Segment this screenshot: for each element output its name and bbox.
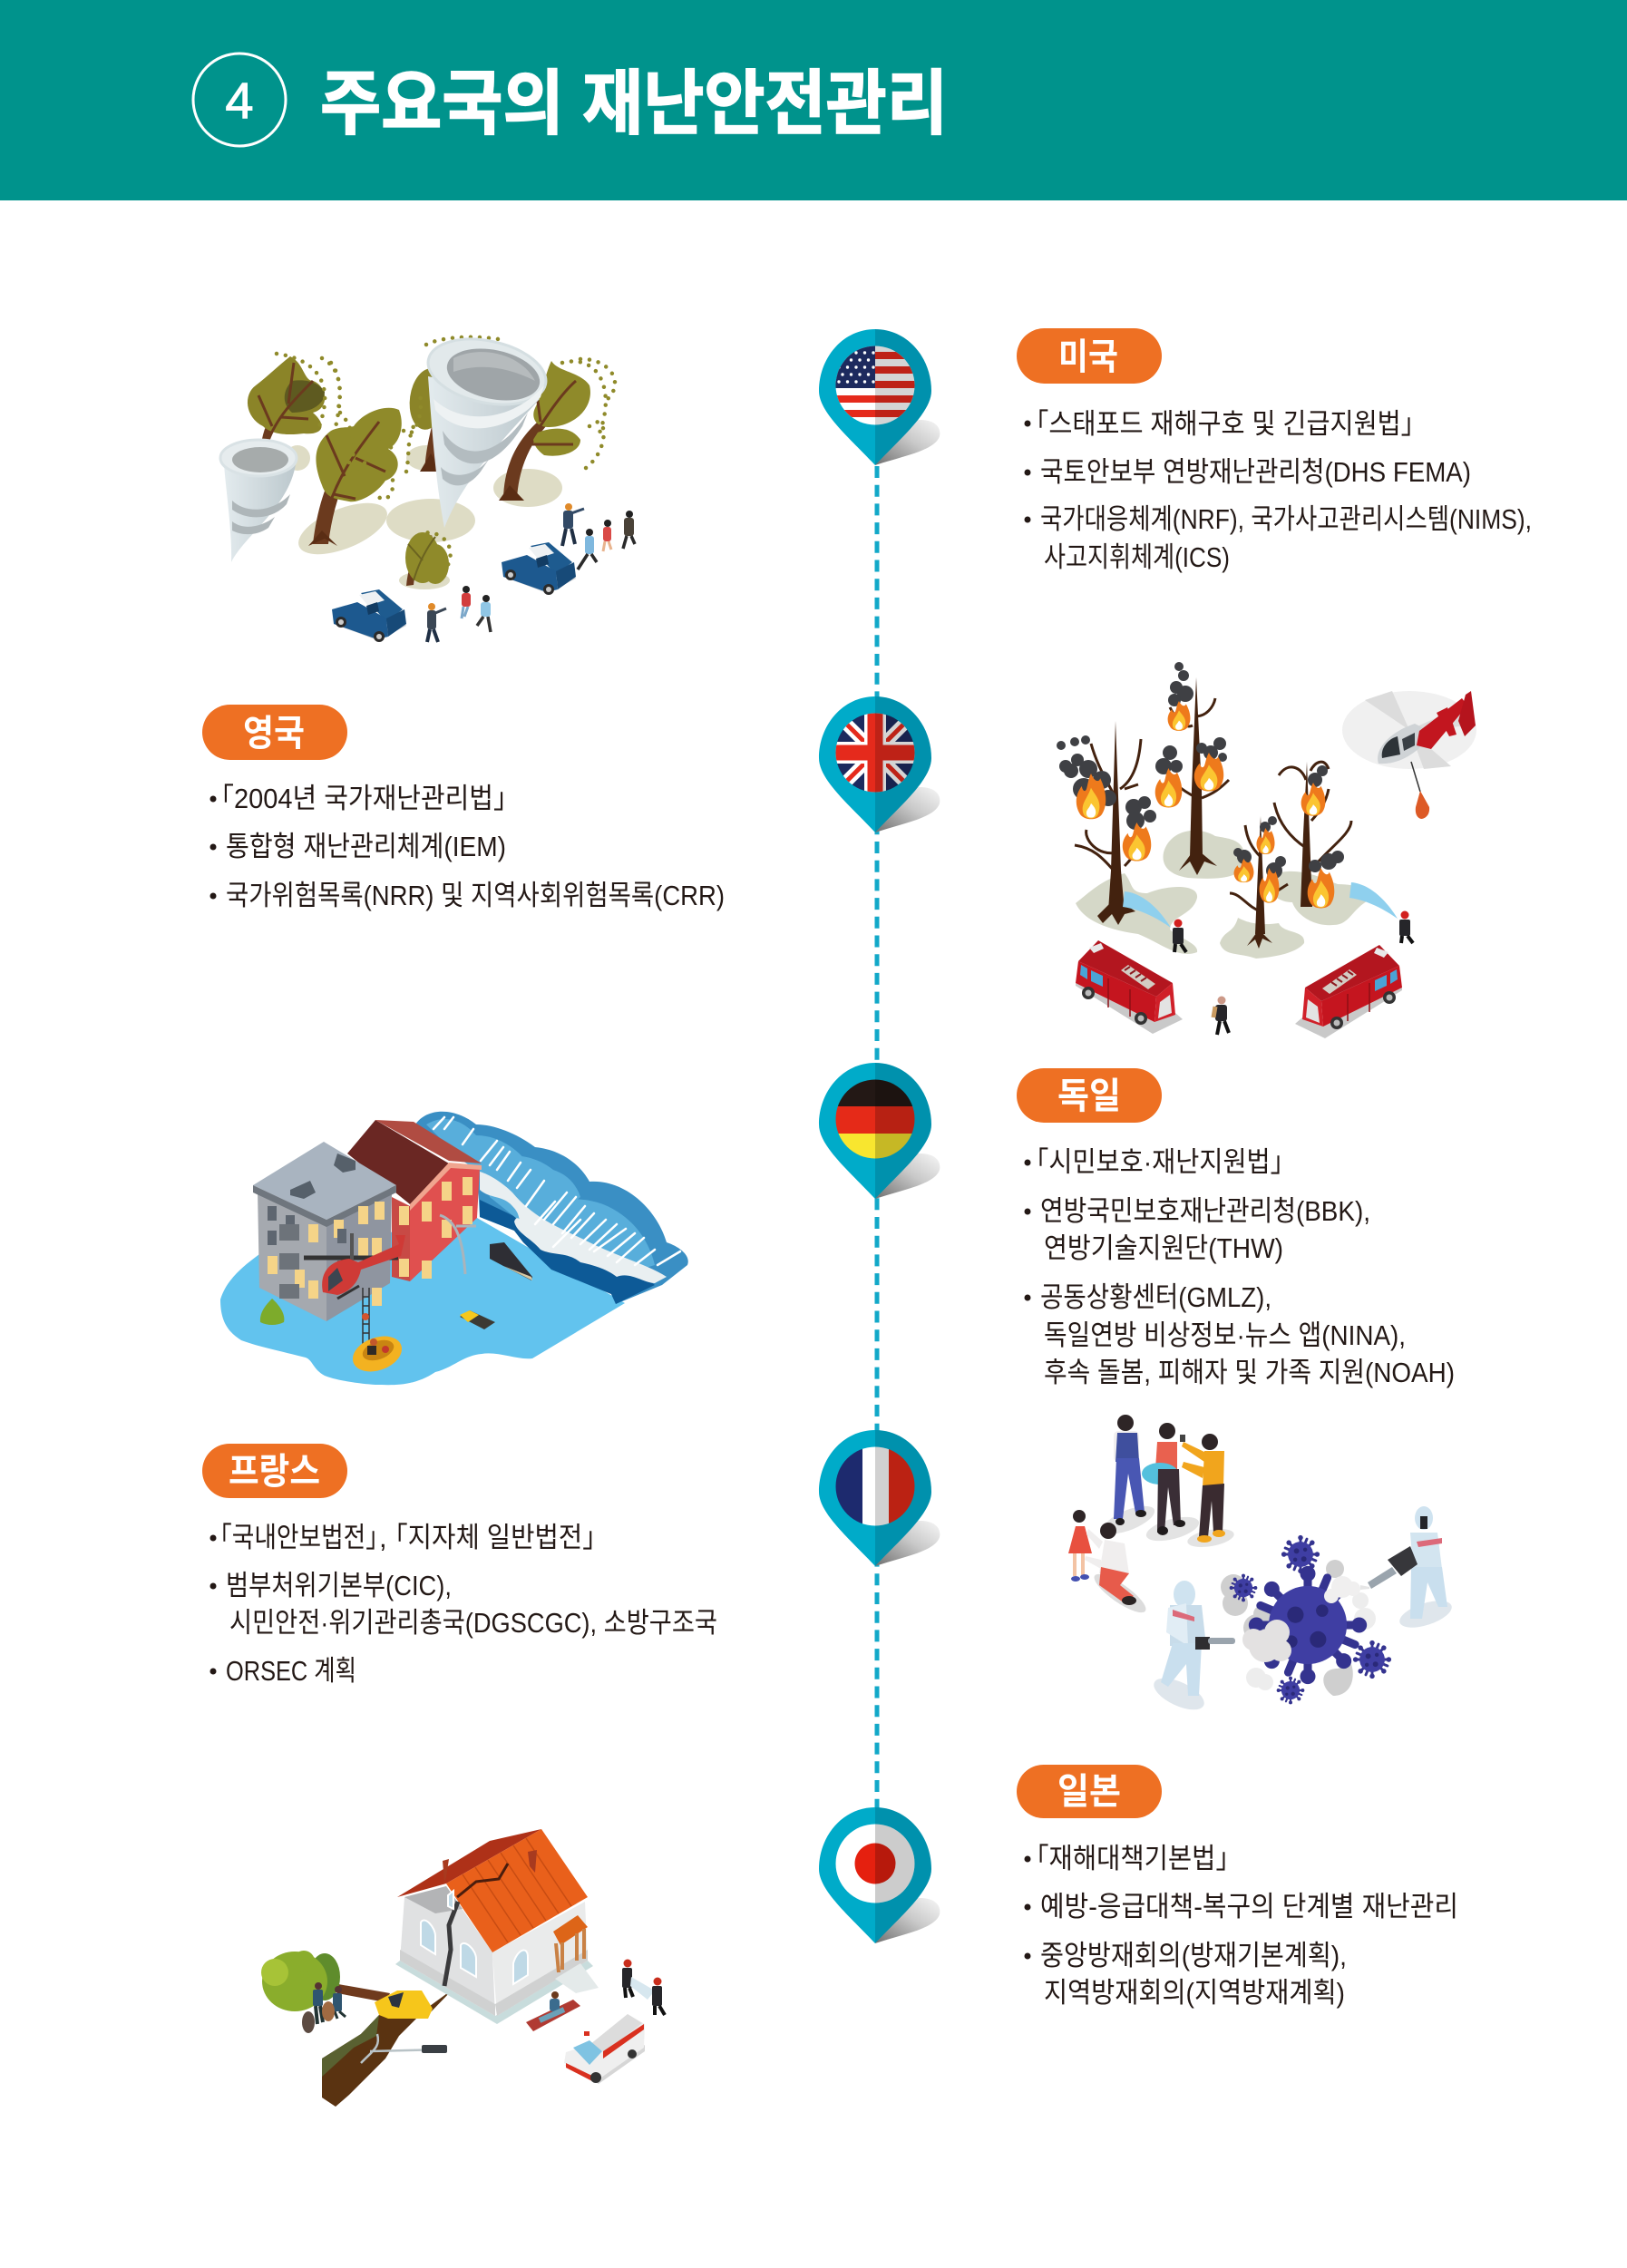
list: Germany: 연방국민보호재난관리청(BBK),: [1040, 1195, 1370, 1227]
list: France: 시민안전·위기관리총국(DGSCGC), 소방구조국: [229, 1607, 717, 1639]
sprayer workers: [1149, 1506, 1455, 1716]
water sprays: [1123, 882, 1398, 928]
list: France: 「국내안보법전」: [208, 1522, 390, 1553]
flood water: [220, 1218, 625, 1385]
rescue helicopter: [304, 1233, 405, 1345]
smoke puffs in front of virus: [1242, 1576, 1369, 1662]
pin: United Kingdom: [819, 696, 940, 832]
list: Germany: 독일연방 비상정보·뉴스 앱(NINA),: [1044, 1319, 1406, 1351]
tornado funnels: [220, 329, 552, 562]
label pill: 영국: 영국: [243, 704, 305, 756]
label pill: 영국: [202, 704, 347, 760]
illustration: tsunami flood: [220, 1112, 688, 1385]
label pill: 미국: 미국: [1058, 327, 1118, 380]
section number badge: [193, 54, 286, 146]
label pill: 프랑스: 프랑스: [229, 1442, 320, 1494]
yellow car: [375, 1991, 433, 2019]
trees: [248, 356, 590, 586]
floating black car: [490, 1242, 532, 1280]
list: Japan: 「재해대책기본법」: [1023, 1843, 1242, 1874]
pin: Japan: [819, 1807, 940, 1943]
timeline dashed connector: [874, 466, 880, 1814]
scorched ground: [1076, 831, 1375, 959]
fire trucks: [1076, 940, 1402, 1038]
tree and rescuers: [261, 1951, 390, 2033]
list: Germany: 후속 돌봄, 피해자 및 가족 지원(NOAH): [1044, 1357, 1455, 1388]
list: United States: [1023, 408, 1532, 573]
list: France: ORSEC 계획: [226, 1655, 356, 1687]
illustration: earthquake: [261, 1829, 665, 2107]
burning trees: [1097, 677, 1312, 949]
list: France: 「지자체 일반법전」: [382, 1522, 609, 1553]
list: United Kingdom: 국가위험목록(NRR) 및 지역사회위험목록(CRR): [226, 880, 725, 911]
firefighters: [1173, 910, 1413, 1035]
list: France: ,: [379, 1522, 387, 1553]
helicopter: [1342, 691, 1476, 819]
police cars: [502, 542, 576, 595]
list: Germany: 「시민보호·재난지원법」: [1023, 1146, 1296, 1178]
list: United States: 국토안보부 연방재난관리청(DHS FEMA): [1040, 456, 1471, 488]
pin: Germany: [819, 1063, 940, 1199]
panel: United States: [1017, 327, 1532, 573]
illustration: wildfire: [1057, 662, 1476, 1038]
label pill: 일본: [1017, 1762, 1162, 1818]
section number badge: 4: [225, 72, 254, 129]
list: France: [208, 1522, 717, 1687]
cracked house: [395, 1829, 599, 2024]
label pill: 미국: [1017, 327, 1162, 384]
grey apartment building: [253, 1142, 396, 1321]
flag: Japan: [835, 1824, 915, 1903]
panel: Germany: [1017, 1066, 1455, 1388]
lifeboat: [348, 1330, 406, 1377]
title: 주요국의 재난안전관리: [320, 47, 948, 149]
pin: France: [819, 1430, 940, 1566]
illustration: tornado: [220, 329, 635, 642]
list: Germany: 연방기술지원단(THW): [1044, 1232, 1283, 1264]
list: Japan: [1023, 1843, 1458, 2009]
list: United States: 국가대응체계(NRF), 국가사고관리시스템(NIMS),: [1040, 503, 1532, 535]
list: United Kingdom: [208, 783, 725, 911]
panel: United Kingdom: [202, 704, 725, 911]
flames: [1077, 701, 1334, 908]
label pill: 일본: 일본: [1057, 1762, 1121, 1815]
list: Japan: 중앙방재회의(방재기본계획),: [1040, 1940, 1347, 1971]
list: Japan: 예방-응급대책-복구의 단계별 재난관리: [1040, 1891, 1458, 1922]
list: Germany: [1023, 1146, 1455, 1388]
panel: Japan: [1017, 1762, 1458, 2009]
pin: United States: [819, 329, 940, 465]
small viruses: [1230, 1535, 1391, 1704]
list: United States: 사고지휘체계(ICS): [1044, 541, 1230, 573]
floating yellow car: [460, 1310, 495, 1329]
evacuating people: [427, 503, 635, 642]
header band: [0, 0, 1627, 200]
flag: United States: [835, 346, 915, 425]
wave: [415, 1112, 688, 1304]
label pill: 독일: [1017, 1066, 1162, 1123]
stretcher rescue: [526, 1991, 580, 2031]
street lamp: [440, 1215, 476, 1274]
illustration: virus response: [1068, 1415, 1455, 1716]
flag: United Kingdom: [835, 713, 915, 793]
panel: France: [202, 1442, 717, 1687]
red building: [347, 1120, 482, 1281]
list: United Kingdom: 통합형 재난관리체계(IEM): [226, 831, 506, 862]
label pill: 독일: 독일: [1057, 1066, 1121, 1119]
list: Japan: 지역방재회의(지역방재계획): [1044, 1977, 1345, 2009]
smoke: [1057, 662, 1344, 879]
firefighters with stretcher: [622, 1959, 665, 2015]
collapsed ground: [322, 1989, 453, 2107]
list: United States: 「스태포드 재해구호 및 긴급지원법」: [1023, 408, 1427, 440]
label pill: 프랑스: [202, 1442, 347, 1498]
shrub: [260, 1299, 284, 1325]
list: Germany: 공동상황센터(GMLZ),: [1040, 1281, 1271, 1313]
flag: Germany: [835, 1079, 915, 1161]
disinfectant smoke: [1221, 1560, 1376, 1696]
people being screened: [1068, 1415, 1235, 1619]
list: France: 범부처위기본부(CIC),: [226, 1570, 452, 1601]
list: United Kingdom: 「2004년 국가재난관리법」: [208, 783, 520, 814]
ambulance: [564, 2014, 645, 2084]
large virus: [1249, 1566, 1367, 1684]
flag: France: [835, 1446, 916, 1526]
leaf debris: [277, 337, 615, 571]
